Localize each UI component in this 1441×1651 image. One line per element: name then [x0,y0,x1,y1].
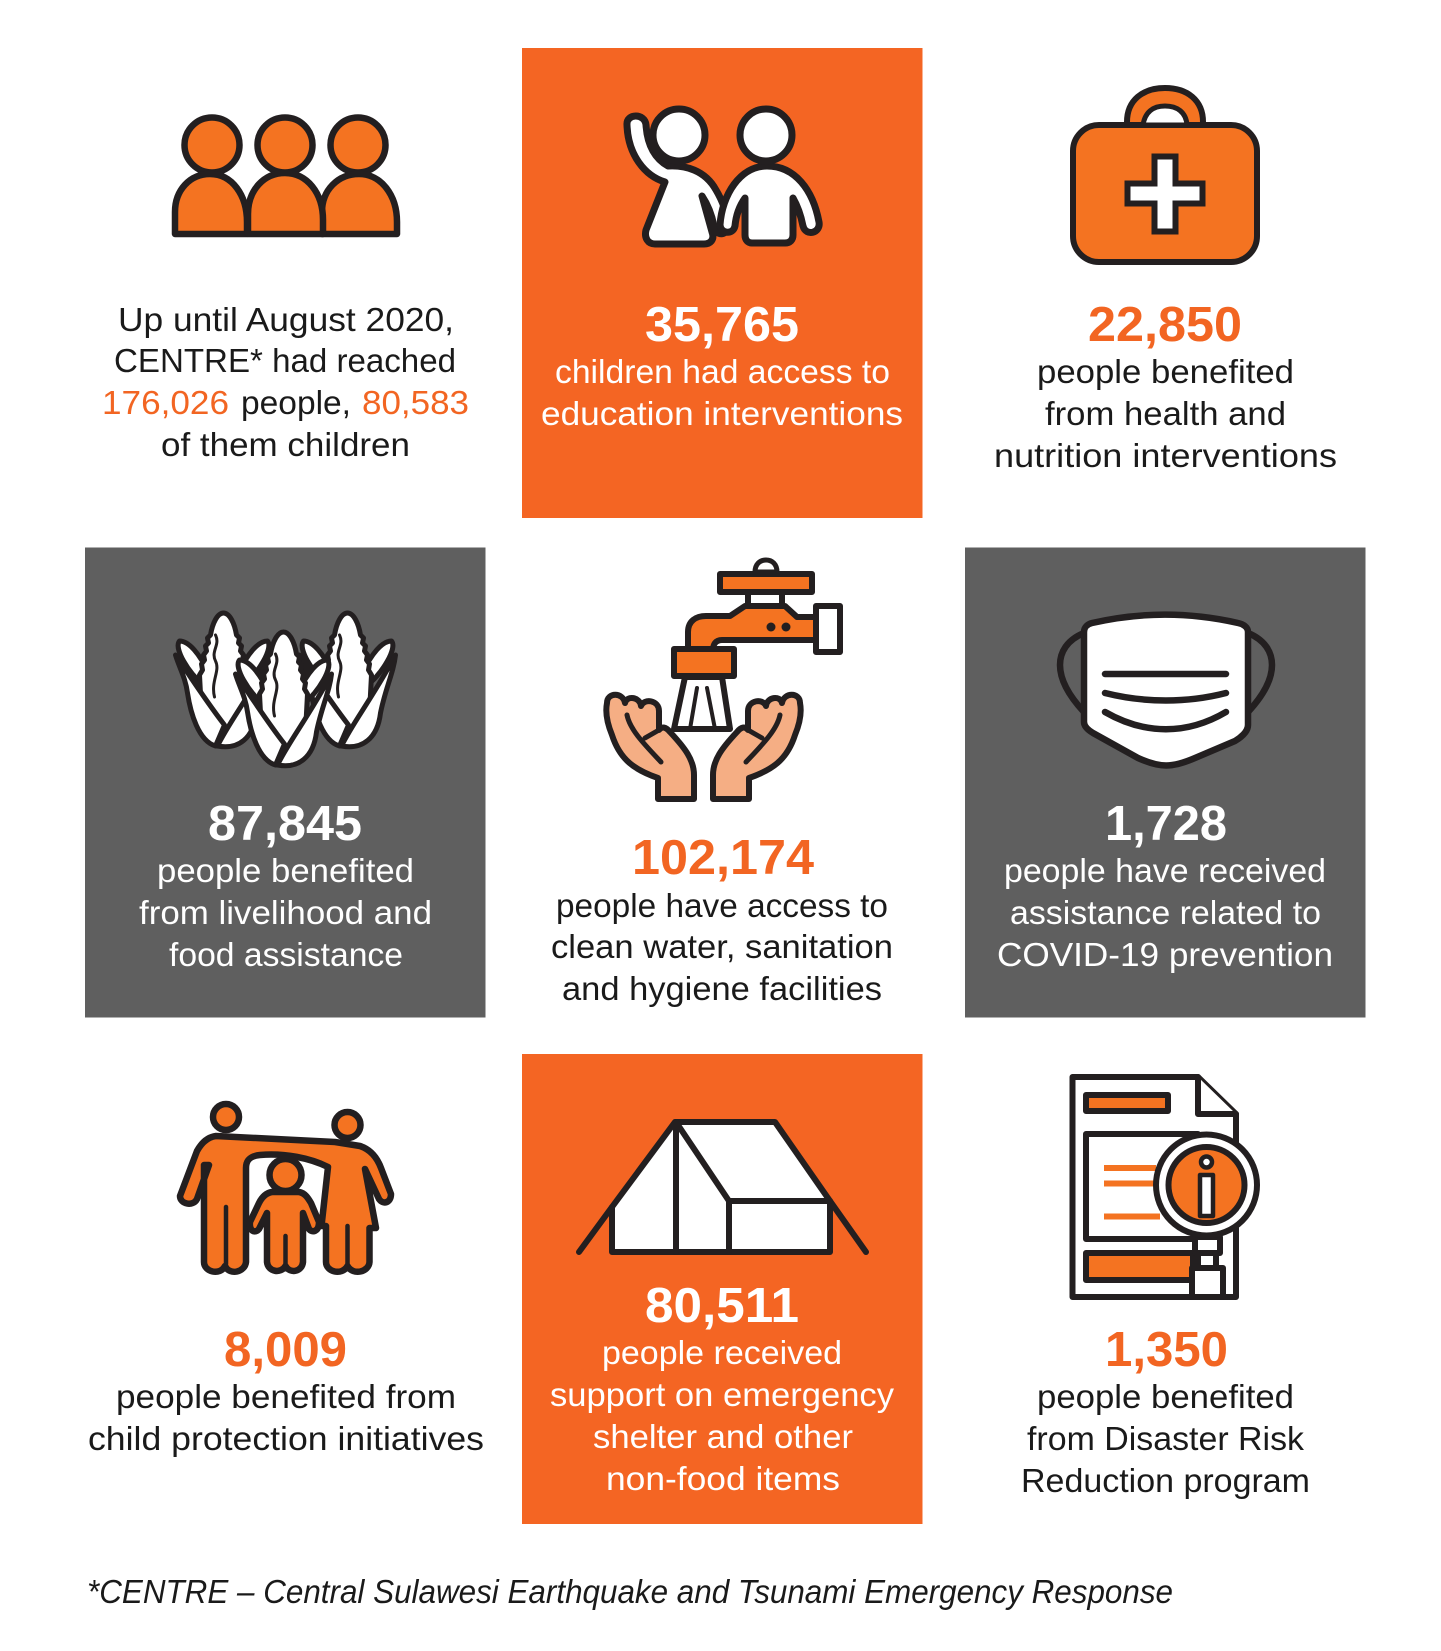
description [139,853,432,974]
description: from livelihood and [139,895,432,932]
description: food assistance [169,937,403,974]
panel: water and sanitation [551,560,893,1008]
statistic: 22,850 [1088,298,1242,352]
left corn [176,613,272,747]
description: Reduction program [1021,1463,1310,1500]
panel background [85,548,486,1018]
description [994,354,1337,475]
summary text: CENTRE* had reached [114,343,456,380]
panel: child protection [88,1104,484,1458]
summary text [102,302,469,464]
panel: covid-19 prevention [965,548,1366,1018]
description [541,354,903,433]
description: children had access to [555,354,890,391]
icon: family [180,1104,391,1272]
icon: tent [579,1122,866,1252]
description: people benefited [1037,1379,1294,1416]
panel background [522,48,922,518]
description: nutrition interventions [994,438,1337,475]
statistic: 1,728 [1105,797,1227,851]
panel background [522,1054,922,1524]
statistic: 1,350 [1105,1323,1228,1377]
panel: disaster risk reduction [1021,1077,1310,1500]
description: from health and [1045,396,1286,433]
middle corn [236,632,332,766]
icon: medical kit [1073,88,1257,262]
description: shelter and other [593,1419,853,1456]
description [551,888,893,1008]
description [997,853,1333,974]
description: clean water, sanitation [551,929,893,966]
statistic: 8,009 [224,1323,347,1377]
description: people benefited [157,853,414,890]
description [1021,1379,1310,1500]
left hand [606,695,694,799]
statistic: 35,765 [645,298,799,352]
description: non-food items [606,1461,840,1498]
description [550,1335,894,1498]
description: people have access to [556,888,888,925]
summary text: Up until August 2020, [118,302,454,339]
panel: education [522,48,922,518]
description: support on emergency [550,1377,894,1414]
panel: total reach [102,118,469,464]
panel: health and nutrition [994,88,1337,475]
description: child protection initiatives [88,1421,484,1458]
description: and hygiene facilities [562,971,882,1008]
icon: face mask [1060,615,1272,766]
description: people benefited from [116,1379,456,1416]
description: people benefited [1037,354,1294,391]
description: people have received [1004,853,1326,890]
icon: corn cobs [176,613,396,766]
panel: emergency shelter [522,1054,922,1524]
statistic: 102,174 [632,831,814,885]
summary text: of them children [161,427,410,464]
description: COVID-19 prevention [997,937,1333,974]
description [88,1379,484,1458]
statistic: 80,511 [645,1279,799,1333]
icon: document with magnifier [1072,1077,1257,1297]
description: education interventions [541,396,903,433]
icon: two children [627,109,819,244]
icon: tap and hands [606,560,840,799]
icon: three people [175,118,397,234]
right corn [300,613,396,747]
panel: livelihood and food [85,548,486,1018]
right hand [713,695,801,799]
summary text: 80,583 [362,385,469,422]
summary text: people, [241,385,351,422]
footnote: *CENTRE – Central Sulawesi Earthquake and Tsunami Emergency Response [87,1574,1173,1611]
description: from Disaster Risk [1027,1421,1304,1458]
panel background [965,548,1366,1018]
description: assistance related to [1010,895,1321,932]
description: people received [602,1335,842,1372]
summary text: 176,026 [102,385,229,422]
statistic: 87,845 [208,797,362,851]
